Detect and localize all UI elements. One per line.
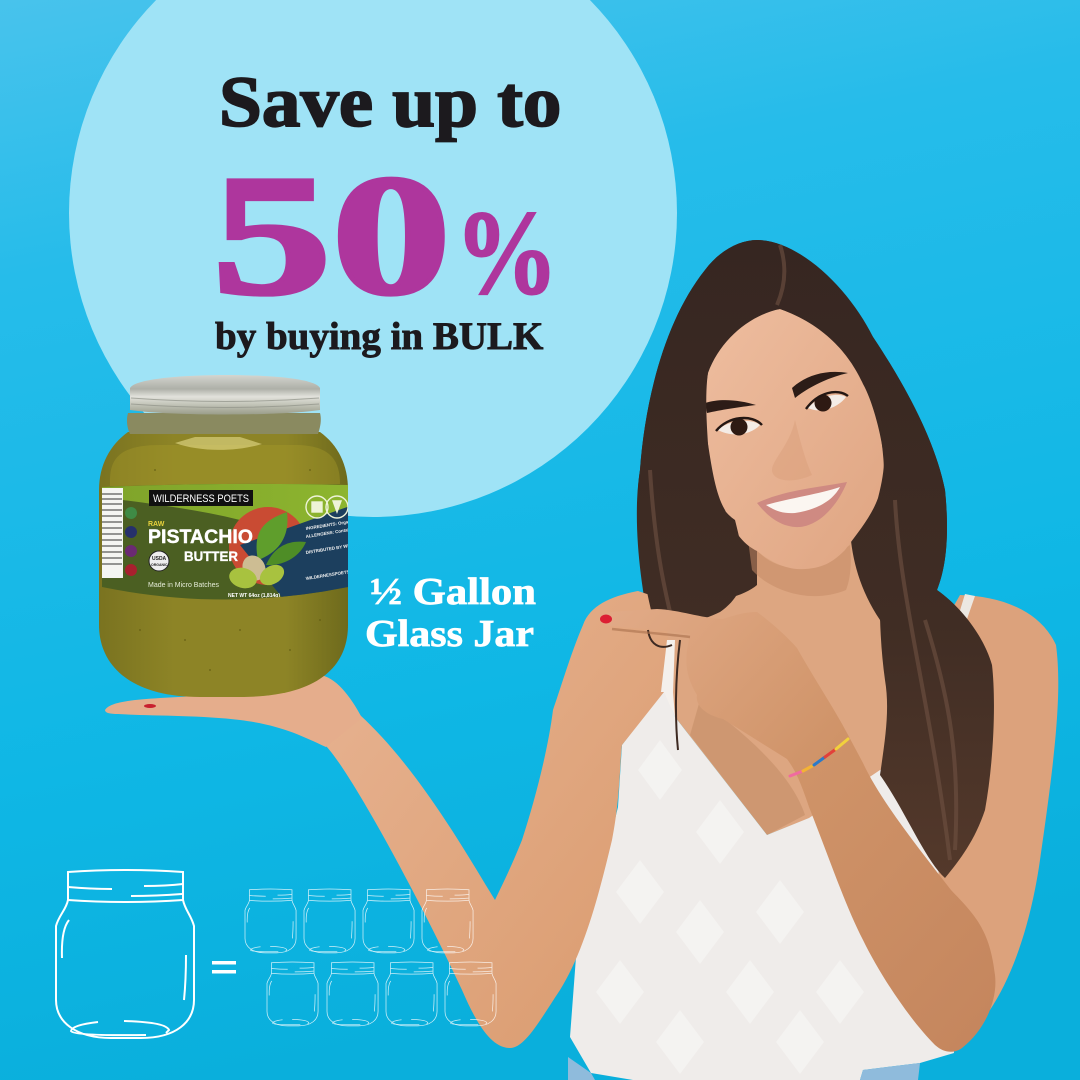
caption: half gallon glass jar: ½ Gallon — [370, 571, 536, 613]
pistachio: PISTACHIO — [148, 527, 253, 548]
eight small jar icons — [245, 889, 496, 1026]
label light green band — [102, 484, 348, 524]
loose hair strand — [648, 630, 680, 750]
caption: half gallon glass jar: Glass Jar — [365, 613, 534, 655]
eyebrows — [705, 372, 848, 413]
top strap right — [951, 594, 975, 645]
raw: RAW — [148, 521, 165, 528]
ingredients text: ALLERGENS: Contains tree nuts — [305, 523, 374, 539]
jar speckles — [139, 469, 321, 671]
big number: 50% — [212, 140, 558, 331]
headline circle — [69, 0, 677, 517]
red half circle — [229, 507, 307, 585]
ingredients text — [306, 521, 348, 580]
jar body — [99, 432, 348, 697]
large jar icon — [56, 870, 194, 1038]
subheading: by buying in bulk: by buying in BULK — [215, 315, 544, 358]
finger shadow — [612, 629, 690, 637]
nutrition panel — [100, 488, 123, 578]
white top — [570, 690, 954, 1080]
nose shadow — [772, 420, 812, 480]
hair highlights — [650, 245, 956, 860]
caption: half gallon glass jar — [365, 571, 536, 655]
pistachios — [229, 556, 284, 588]
leaves — [257, 512, 306, 565]
face — [705, 309, 884, 569]
ingredients text: DISTRIBUTED BY WILDERNESS — [305, 540, 373, 555]
left hand under the jar — [105, 675, 362, 747]
chest and neck — [640, 530, 930, 835]
top texture — [596, 740, 864, 1074]
ingredients text: INGREDIENTS: Organic Pistachios — [305, 515, 378, 531]
heading: save up to: Save up to — [219, 63, 561, 142]
jeans — [568, 1057, 920, 1080]
jar shoulder highlights — [110, 445, 340, 486]
woman — [105, 240, 1058, 1080]
fingernail — [144, 704, 156, 708]
fingernail pointing — [600, 614, 612, 624]
certification seals — [306, 496, 348, 518]
jar lid — [130, 375, 320, 414]
eyes — [716, 392, 848, 436]
chest shadow — [690, 700, 805, 835]
made in micro batches: Made in Micro Batches — [148, 580, 219, 589]
right upper arm and shoulder — [900, 595, 1058, 1010]
equals sign — [212, 961, 236, 974]
usda badge: USDA — [152, 556, 167, 562]
usda badge: ORGANIC — [151, 563, 168, 567]
usda badge — [149, 551, 169, 571]
jar label — [102, 484, 348, 600]
butter: BUTTER — [184, 548, 238, 564]
back hair — [637, 240, 994, 878]
smile — [757, 482, 847, 527]
net weight: NET WT 64oz (1,814g) — [228, 593, 280, 599]
neck shadow — [748, 540, 851, 596]
diet badges — [125, 507, 137, 576]
brand bar — [149, 490, 253, 506]
hair front — [638, 240, 994, 878]
jar neck — [127, 413, 321, 434]
jar reflection — [175, 437, 262, 450]
right forearm and fist — [600, 609, 995, 1052]
brand bar: WILDERNESS POETS — [153, 493, 249, 505]
rainbow bracelet — [790, 739, 848, 776]
top strap left — [661, 640, 675, 717]
navy panel — [240, 507, 348, 597]
big number: 50%: % — [455, 187, 558, 320]
label dark base — [102, 484, 347, 600]
ingredients text: WILDERNESSPOETS.COM — [305, 567, 361, 581]
product jar — [99, 375, 348, 697]
big number: 50%: 50 — [212, 140, 451, 331]
left arm — [325, 591, 668, 1048]
